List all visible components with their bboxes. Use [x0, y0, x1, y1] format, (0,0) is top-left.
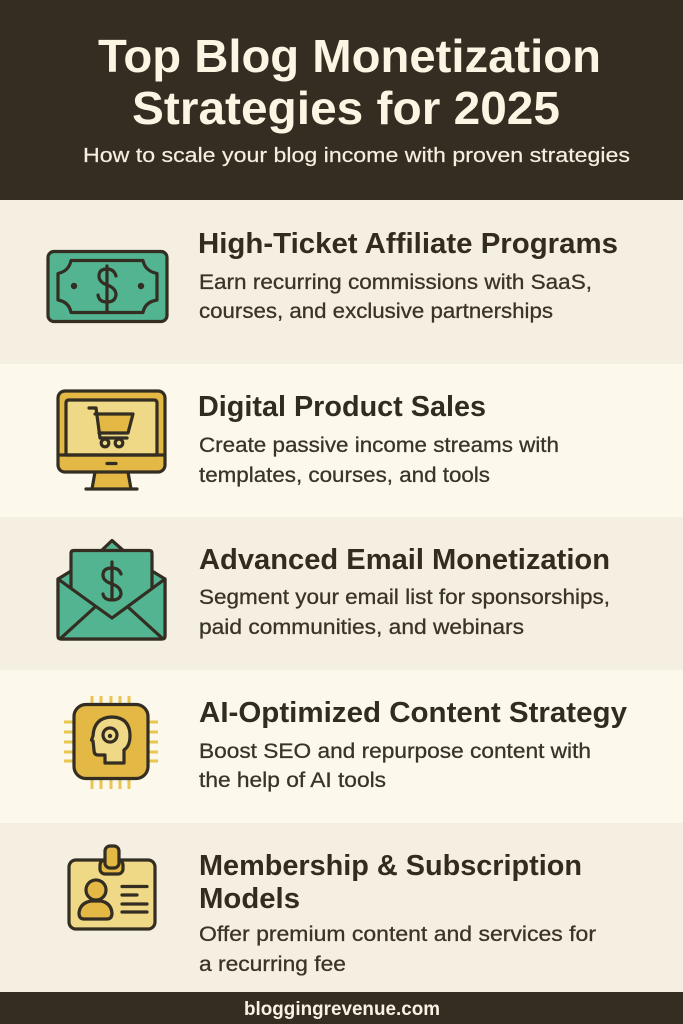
icon: membership ID badge [69, 846, 155, 929]
title: Strategies for 2025 [132, 82, 560, 134]
panel: ai-optimized content strategy [0, 670, 683, 823]
description: templates, courses, and tools [199, 463, 490, 487]
title [98, 30, 601, 134]
header panel [0, 0, 683, 200]
heading: Models [199, 883, 300, 915]
description: a recurring fee [199, 952, 346, 976]
heading: High-Ticket Affiliate Programs [198, 228, 618, 260]
heading [199, 850, 582, 915]
heading: Digital Product Sales [198, 391, 486, 423]
description [199, 270, 592, 323]
description: Create passive income streams with [199, 433, 559, 457]
panel: membership and subscription models [0, 823, 683, 992]
description: the help of AI tools [199, 768, 386, 792]
description [199, 922, 596, 976]
description [199, 739, 591, 792]
footer url: bloggingrevenue.com [244, 999, 440, 1020]
panel: high-ticket affiliate programs [0, 200, 683, 364]
icon: envelope with dollar [58, 540, 165, 639]
icon: AI chip with head [64, 696, 158, 789]
heading: Membership & Subscription [199, 850, 582, 882]
description: Earn recurring commissions with SaaS, [199, 270, 592, 294]
panel: digital product sales [0, 364, 683, 517]
subtitle: How to scale your blog income with proven strategies [83, 145, 630, 167]
icon: monitor with cart [58, 391, 165, 489]
title: Top Blog Monetization [98, 30, 601, 82]
description: paid communities, and webinars [199, 615, 524, 639]
footer bar [0, 992, 683, 1024]
icon: dollar bill [48, 252, 167, 322]
description [199, 433, 559, 487]
description: Boost SEO and repurpose content with [199, 739, 591, 763]
description: courses, and exclusive partnerships [199, 299, 553, 323]
panel: advanced email monetization [0, 517, 683, 670]
description: Segment your email list for sponsorships, [199, 585, 610, 609]
heading: AI-Optimized Content Strategy [199, 697, 627, 729]
description [199, 585, 610, 639]
description: Offer premium content and services for [199, 922, 596, 946]
heading: Advanced Email Monetization [199, 544, 610, 576]
